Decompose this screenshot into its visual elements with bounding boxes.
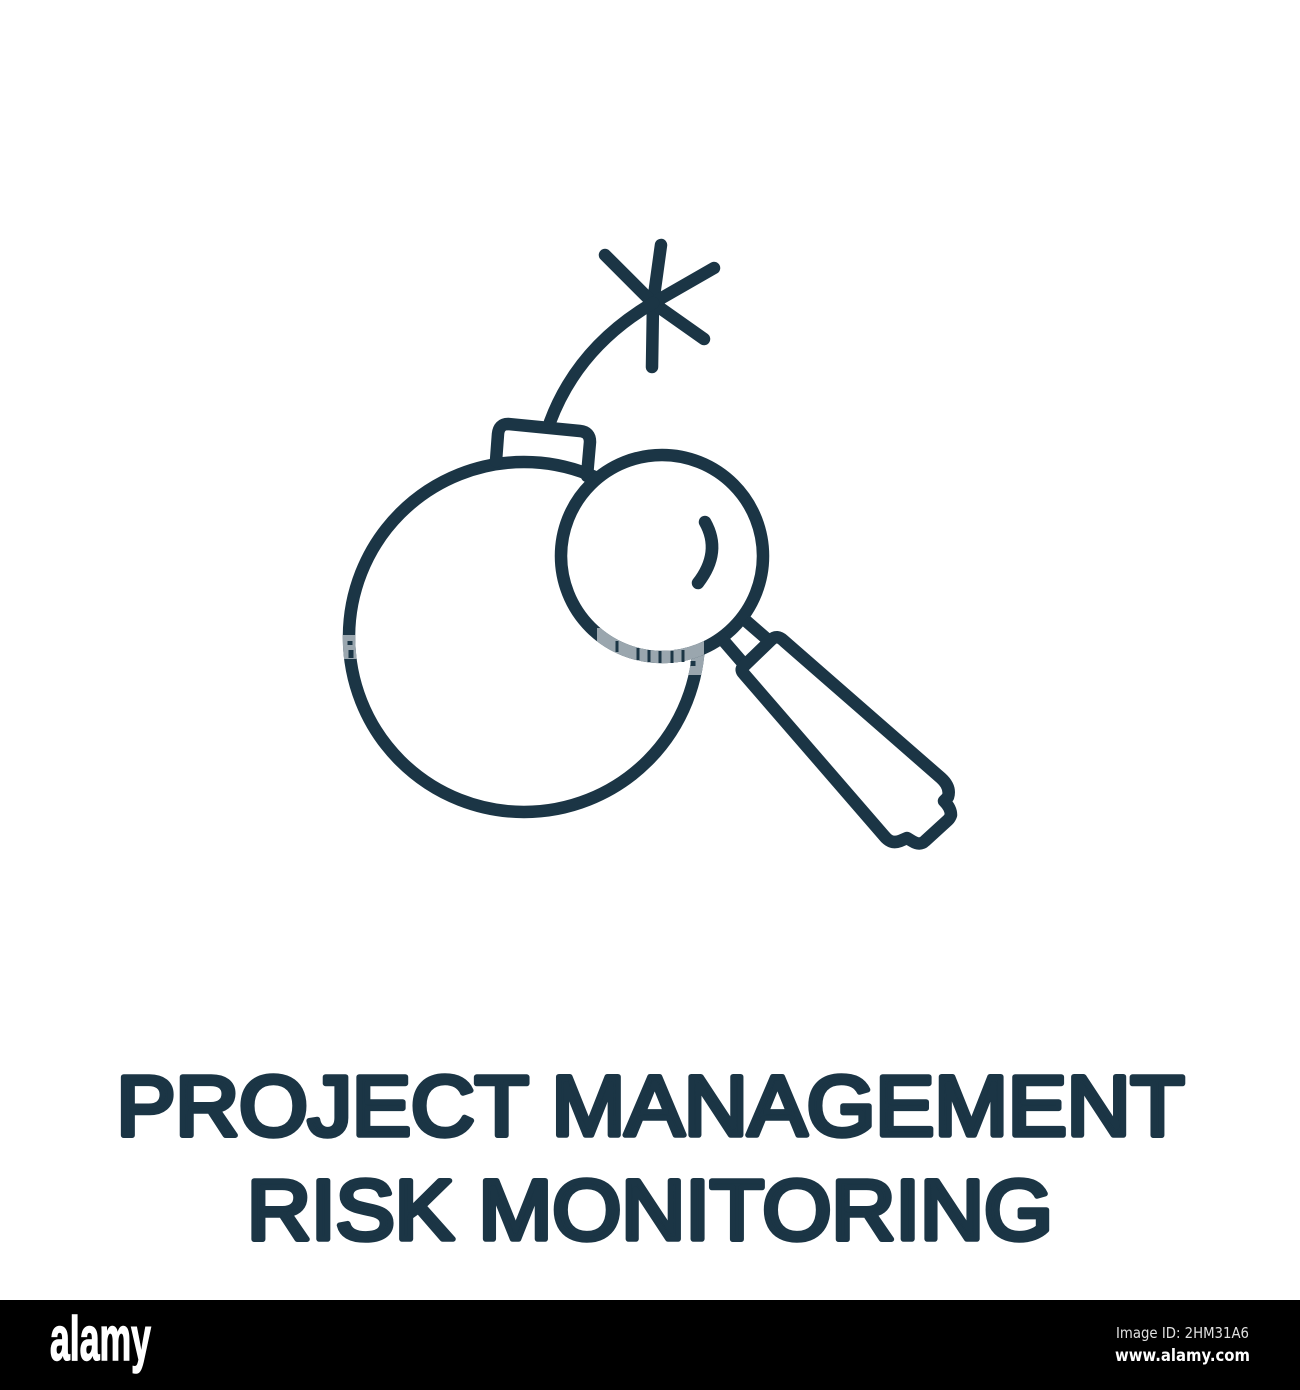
icon: fuse	[550, 303, 653, 422]
icon: bomb cap	[496, 424, 590, 476]
watermark on bomb body	[343, 635, 704, 675]
watermark on lens rim	[597, 628, 704, 664]
footer bar	[0, 1300, 1300, 1390]
footer logo: alamy	[50, 1305, 151, 1374]
title: project management: PROJECT MANAGEMENT	[116, 1059, 1184, 1153]
icon: bomb body	[349, 462, 699, 812]
title: risk monitoring: RISK MONITORING	[247, 1163, 1053, 1257]
icon: bomb under magnifying glass	[349, 245, 951, 844]
icon: magnifier handle	[742, 637, 951, 844]
icon: lens highlight	[698, 522, 712, 583]
website: www.alamy.com	[1115, 1346, 1250, 1366]
image id: Image ID: 2HM31A6	[1116, 1324, 1249, 1342]
icon: spark on fuse	[605, 245, 714, 367]
icon: magnifier lens	[561, 455, 763, 657]
icon: magnifier neck	[723, 620, 768, 662]
